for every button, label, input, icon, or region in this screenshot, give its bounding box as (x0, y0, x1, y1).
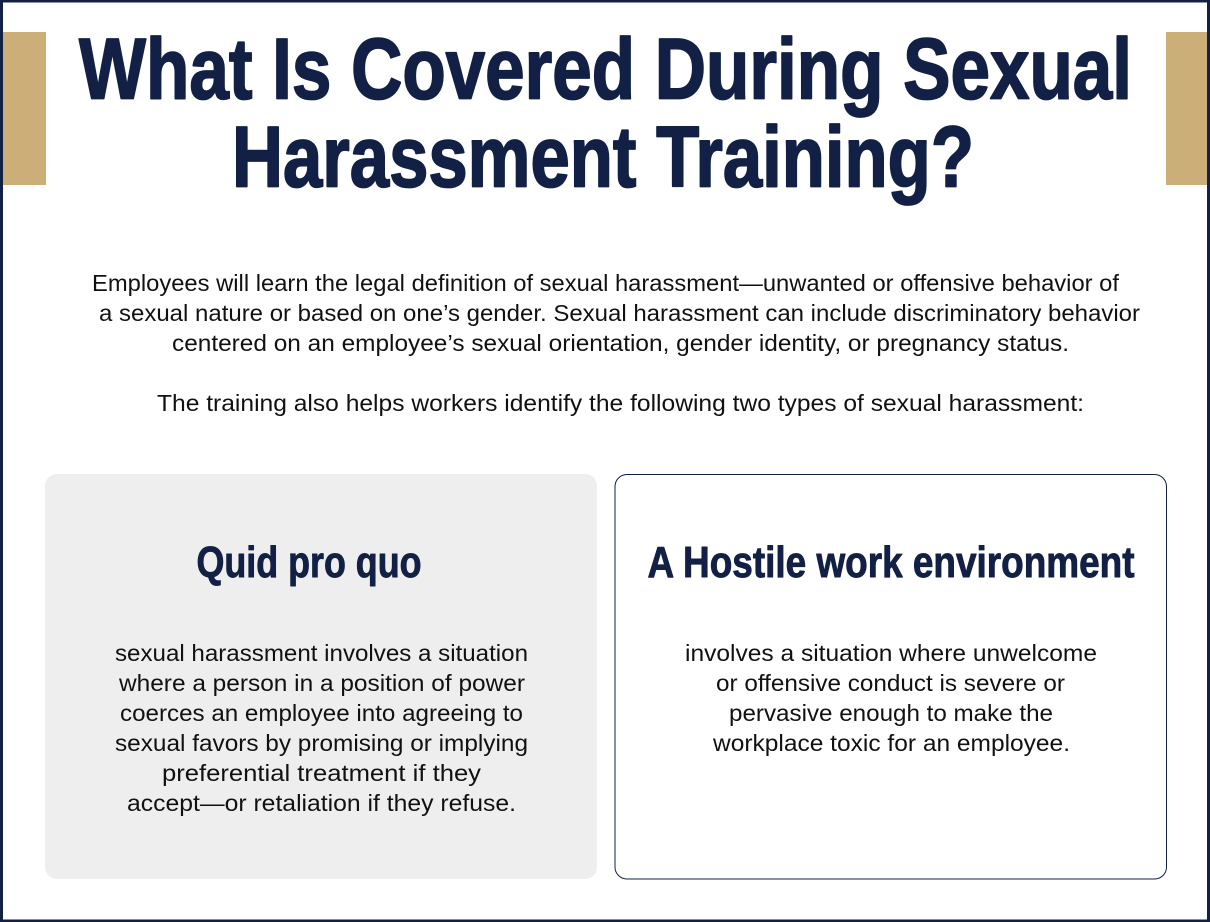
hostile work environment description: pervasive enough to make the (729, 700, 1053, 726)
hostile work environment description: workplace toxic for an employee. (712, 730, 1070, 756)
intro text: The training also helps workers identify the following two types of sexual harassment: (157, 390, 1084, 416)
quid pro quo description: coerces an employee into agreeing to (120, 700, 523, 726)
panel: hostile work environment (615, 474, 1166, 879)
quid pro quo description: accept—or retaliation if they refuse. (127, 790, 516, 816)
hostile work environment description (685, 640, 1097, 756)
panel: quid pro quo (45, 474, 597, 879)
title: Harassment Training? (232, 110, 974, 206)
quid pro quo description: preferential treatment if they (162, 760, 481, 786)
quid pro quo description: where a person in a position of power (118, 670, 525, 696)
quid pro quo description (115, 640, 528, 816)
hostile work environment description: involves a situation where unwelcome (685, 640, 1097, 666)
title (79, 22, 1132, 206)
left gold accent bar (3, 32, 46, 185)
intro text: centered on an employee’s sexual orientation, gender identity, or pregnancy status. (172, 330, 1069, 356)
right gold accent bar (1166, 32, 1207, 185)
intro text: a sexual nature or based on one’s gender. Sexual harassment can include discriminatory behavior (99, 300, 1140, 326)
quid pro quo description: sexual harassment involves a situation (115, 640, 528, 666)
heading: quid pro quo: Quid pro quo (196, 538, 422, 587)
hostile work environment description: or offensive conduct is severe or (716, 670, 1065, 696)
quid pro quo description: sexual favors by promising or implying (115, 730, 528, 756)
intro text (92, 270, 1140, 416)
intro text: Employees will learn the legal definition of sexual harassment—unwanted or offensive behavior of (92, 270, 1119, 296)
